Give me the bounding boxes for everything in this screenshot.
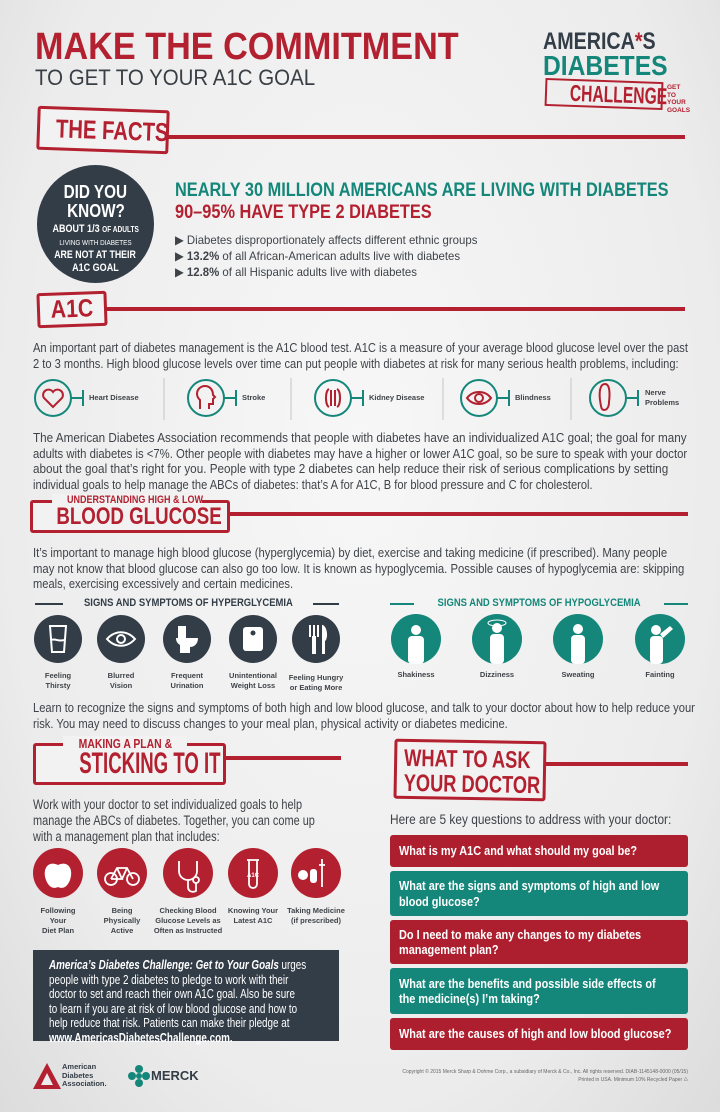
plan icons: Your	[50, 916, 66, 925]
hypoglycemia panel: Fainting	[645, 670, 675, 679]
title: TO GET TO YOUR A1C GOAL	[35, 65, 315, 90]
health risks icon row	[34, 378, 679, 420]
logo: American Diabetes Association: American	[62, 1062, 96, 1071]
hyperglycemia panel: Thirsty	[45, 681, 70, 690]
A1C goal text	[33, 430, 687, 492]
plan icons: Checking Blood	[159, 906, 217, 915]
question 3: Do I need to make any changes to my diabetes	[399, 926, 641, 942]
A1C goal text: about the goal that’s right for you. People with type 2 diabetes can help reduce their risk of serious complications by setting	[33, 461, 668, 476]
A1C intro text	[33, 340, 688, 371]
blood glucose intro text: It’s important to manage high blood glucose (hyperglycemia) by diet, exercise and taking medicine (if prescribed). Many people	[33, 545, 667, 560]
logo: America's Diabetes Challenge: AMERICA*S	[543, 28, 656, 55]
challenge pledge box	[33, 950, 339, 1041]
title: MAKE THE COMMITMENT	[35, 26, 459, 68]
facts bullets: ▶ Diabetes disproportionately affects different ethnic groups	[175, 233, 477, 247]
plan intro text	[33, 797, 315, 844]
section header: A1C	[36, 290, 685, 328]
logo: Merck	[128, 1065, 199, 1087]
section header: what to ask your doctor	[394, 738, 688, 802]
challenge pledge box: America’s Diabetes Challenge: Get to Your Goals urges	[49, 957, 306, 972]
health risks icon row: Kidney Disease	[369, 393, 424, 402]
hyperglycemia panel: or Eating More	[290, 683, 342, 692]
section header: A1C: A1C	[50, 294, 94, 324]
question 4: What are the benefits and possible side effects of	[399, 976, 656, 990]
did you know circle	[37, 165, 154, 283]
plan icons: Active	[111, 926, 133, 935]
hyperglycemia panel: Vision	[110, 681, 132, 690]
hyperglycemia panel: Blurred	[108, 671, 134, 680]
facts headline: 90–95% HAVE TYPE 2 DIABETES	[175, 202, 432, 223]
A1C goal text: The American Diabetes Association recommends that people with diabetes have an individualized A1C goal; the goal for many	[33, 430, 687, 445]
health risks icon row: Stroke	[242, 393, 265, 402]
hyperglycemia panel: Unintentional	[229, 671, 277, 680]
recognize signs text: Learn to recognize the signs and symptoms of both high and low blood glucose, and talk to your doctor about how to help reduce your	[33, 700, 695, 715]
question 3: management plan?	[399, 942, 499, 957]
question 5: What are the causes of high and low blood glucose?	[399, 1026, 671, 1041]
question 2: blood glucose?	[399, 894, 480, 908]
hypoglycemia panel	[390, 597, 688, 679]
question 2	[390, 871, 688, 916]
section header: blood glucose: UNDERSTANDING HIGH & LOW	[67, 494, 203, 506]
health risks icon row: Blindness	[515, 393, 551, 402]
section header: what to ask your doctor: WHAT TO ASK	[404, 745, 531, 774]
A1C intro text: 2 to 3 months. High blood glucose levels over time can put people with diabetes at risk for many serious health problems, including:	[33, 356, 679, 371]
challenge pledge box: doctor to set and reach their own A1C goal. Also be sure	[49, 986, 295, 1001]
hyperglycemia panel: Weight Loss	[231, 681, 275, 690]
plan icons: A1C	[247, 873, 260, 879]
hypoglycemia panel: SIGNS AND SYMPTOMS OF HYPOGLYCEMIA	[437, 597, 641, 609]
logo: America's Diabetes Challenge: GET	[667, 84, 680, 91]
plan intro text: Work with your doctor to set individualized goals to help	[33, 797, 302, 812]
facts bullets	[175, 233, 477, 279]
hyperglycemia panel: SIGNS AND SYMPTOMS OF HYPERGLYCEMIA	[84, 597, 292, 609]
challenge pledge box: to learn if you are at risk of low blood glucose and how to	[49, 1001, 297, 1016]
hypoglycemia panel: Shakiness	[397, 670, 435, 679]
copyright: Copyright © 2015 Merck Sharp & Dohme Corp., a subsidiary of Merck & Co., Inc. All rights reserved. DIAB-1145148-0000 (05/15)	[402, 1069, 688, 1075]
recognize signs text	[33, 700, 695, 731]
question 1: What is my A1C and what should my goal be?	[399, 843, 637, 858]
facts bullets: ▶ 12.8% of all Hispanic adults live with diabetes	[175, 265, 417, 279]
health risks icon row: Problems	[645, 398, 679, 407]
logo: Merck: MERCK	[151, 1068, 199, 1083]
blood glucose intro text: may not know that blood glucose can also go too low. It is known as hypoglycemia. Possible causes of hypoglycemia are: skipping	[33, 561, 684, 576]
plan icons: Glucose Levels as	[155, 916, 221, 925]
question 4: the medicine(s) I’m taking?	[399, 991, 540, 1006]
plan intro text: manage the ABCs of diabetes. Together, you can come up	[33, 813, 315, 828]
hyperglycemia panel	[34, 597, 344, 692]
challenge pledge box: people with type 2 diabetes to pledge to work with their	[49, 972, 288, 987]
logo: American Diabetes Association: Association.	[62, 1079, 107, 1088]
section header: blood glucose	[30, 494, 688, 533]
question 1	[390, 835, 688, 867]
did you know circle: LIVING WITH DIABETES	[59, 238, 132, 247]
section header: making a plan	[33, 736, 341, 785]
logo: America's Diabetes Challenge: DIABETES	[543, 50, 668, 81]
plan icons	[33, 848, 345, 935]
question 5	[390, 1018, 688, 1050]
section header: making a plan: MAKING A PLAN &	[78, 736, 172, 751]
logo: American Diabetes Association: Diabetes	[62, 1070, 93, 1080]
question 3	[390, 920, 688, 964]
logo: America's Diabetes Challenge	[543, 28, 690, 114]
facts headline: NEARLY 30 MILLION AMERICANS ARE LIVING WITH DIABETES	[175, 180, 669, 201]
plan icons: Following	[40, 906, 76, 915]
section header: what to ask your doctor: YOUR DOCTOR	[404, 770, 540, 799]
hypoglycemia panel: Dizziness	[480, 670, 514, 679]
plan icons: Being	[112, 906, 132, 915]
section header: blood glucose: BLOOD GLUCOSE	[56, 503, 222, 530]
plan icons: Diet Plan	[42, 926, 74, 935]
logo: America's Diabetes Challenge: TO	[667, 92, 676, 98]
question 2: What are the signs and symptoms of high and low	[399, 878, 659, 893]
did you know circle: ABOUT 1/3 OF ADULTS	[52, 223, 139, 235]
question 4	[390, 968, 688, 1014]
section header: making a plan: STICKING TO IT	[79, 747, 221, 780]
blood glucose intro text	[33, 545, 684, 591]
logo: America's Diabetes Challenge: CHALLENGE	[569, 80, 668, 109]
logo: American Diabetes Association	[33, 1062, 107, 1089]
A1C goal text: adults with diabetes is <7%. Other people with diabetes may have a higher or lower A1C goal, so be sure to speak with your doctor	[33, 446, 687, 461]
section header: the facts	[36, 106, 685, 154]
doctor intro text: Here are 5 key questions to address with your doctor:	[390, 812, 671, 827]
recognize signs text: risk. You may need to discuss changes to your meal plan, physical activity or diabetes medicine.	[33, 716, 508, 731]
challenge pledge box: help reduce that risk. Patients can make their pledge at	[49, 1015, 289, 1030]
plan icons: (if prescribed)	[291, 916, 341, 925]
hyperglycemia panel: Urination	[171, 681, 203, 690]
plan icons: Physically	[104, 916, 140, 925]
health risks icon row: Nerve	[645, 388, 666, 397]
health risks icon row: Heart Disease	[89, 393, 139, 402]
plan icons: Knowing Your	[228, 906, 278, 915]
A1C intro text: An important part of diabetes management is the A1C blood test. A1C is a measure of your average blood glucose level over the past	[33, 340, 688, 355]
title	[35, 26, 459, 90]
hypoglycemia panel: Sweating	[562, 670, 594, 679]
did you know circle: A1C GOAL	[72, 262, 119, 274]
facts headline	[175, 180, 669, 223]
blood glucose intro text: meals, exercising excessively and certain medicines.	[33, 576, 293, 591]
plan icons: Latest A1C	[234, 916, 272, 925]
did you know circle: KNOW?	[67, 201, 124, 221]
A1C goal text: individual goals to help manage the ABCs of diabetes: that’s A for A1C, B for blood pressure and C for cholesterol.	[33, 477, 593, 492]
facts bullets: ▶ 13.2% of all African-American adults live with diabetes	[175, 249, 460, 263]
hyperglycemia panel: Frequent	[171, 671, 203, 680]
logo: America's Diabetes Challenge: GOALS	[667, 106, 690, 114]
copyright	[402, 1069, 688, 1083]
did you know circle: ARE NOT AT THEIR	[55, 249, 136, 261]
logo: America's Diabetes Challenge: YOUR	[667, 99, 686, 106]
plan icons: Often as Instructed	[154, 926, 222, 935]
hyperglycemia panel: Feeling Hungry	[289, 673, 343, 682]
hyperglycemia panel: Feeling	[45, 671, 71, 680]
plan icons: Taking Medicine	[287, 906, 345, 915]
section header: the facts: THE FACTS	[55, 113, 169, 147]
did you know circle: DID YOU	[64, 182, 127, 202]
plan intro text: with a management plan that includes:	[33, 829, 220, 844]
challenge pledge box: www.AmericasDiabetesChallenge.com.	[49, 1030, 233, 1045]
copyright: Printed in USA. Minimum 10% Recycled Paper ♺	[578, 1077, 688, 1083]
